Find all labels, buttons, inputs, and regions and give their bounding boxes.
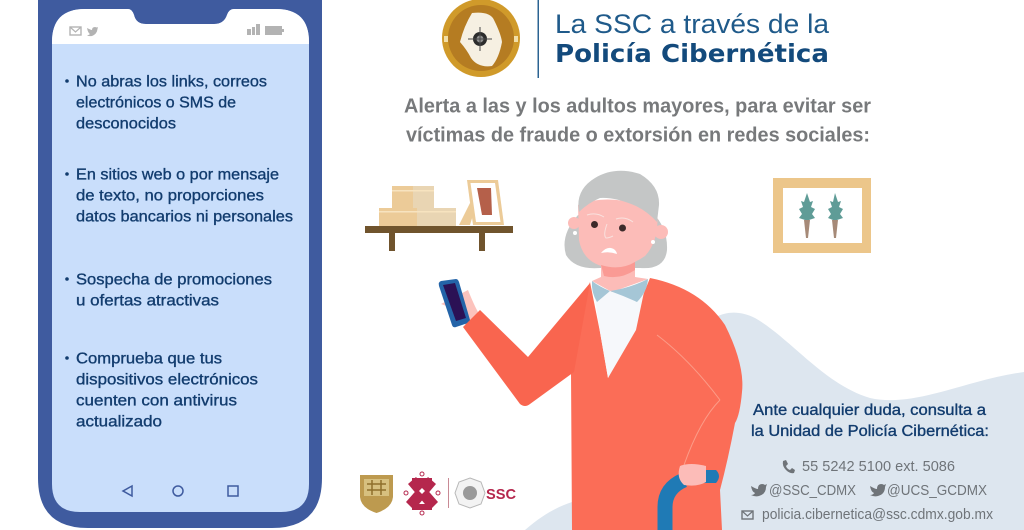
advice 4: dispositivos electrónicos [76, 372, 258, 388]
twitter SSC: @SSC_CDMX [769, 483, 856, 499]
advice 1: electrónicos o SMS de [76, 94, 236, 112]
left hand [441, 290, 478, 328]
advice 4: cuenten con antivirus [76, 392, 237, 410]
logo: CDMX red knot [404, 472, 440, 515]
gripping hand [679, 464, 706, 486]
phone navigation buttons [123, 486, 238, 496]
glasses [587, 214, 633, 238]
ears [568, 217, 580, 229]
coat lapel line [657, 335, 720, 465]
contact heading: Ante cualquier duda, consulta a [753, 402, 986, 419]
contact details [742, 459, 994, 523]
lower hair [564, 212, 667, 268]
advice 3 [65, 272, 272, 310]
contact heading: la Unidad de Policía Cibernética: [751, 423, 989, 440]
phone body [38, 0, 322, 528]
subtitle: víctimas de fraude o extorsión en redes sociales: [406, 124, 870, 146]
contact heading [751, 402, 989, 440]
illustration: elderly woman with phone [439, 171, 742, 530]
logo: CDMX shield [360, 475, 393, 513]
logo divider [448, 478, 449, 508]
phone screen [52, 9, 309, 512]
neck [592, 258, 648, 292]
face [578, 200, 658, 268]
advice 3: u ofertas atractivas [76, 292, 219, 310]
advice 4 [65, 350, 258, 430]
coat [571, 278, 742, 530]
advice 1: desconocidos [76, 116, 176, 132]
mouth [601, 248, 617, 254]
advice 2: datos bancarios ni personales [76, 208, 293, 226]
phone number: 55 5242 5100 ext. 5086 [802, 459, 955, 475]
subtitle [404, 96, 871, 146]
advice 4: Comprueba que tus [76, 350, 222, 368]
twitter UCS: @UCS_GCDMX [887, 483, 987, 499]
shelf with boxes and photo frame [365, 180, 513, 251]
cane [665, 480, 684, 530]
email: policia.cibernetica@ssc.cdmx.gob.mx [762, 507, 994, 523]
logo: SSC [455, 478, 516, 508]
title: La SSC a través de la [555, 9, 830, 39]
advice 3: Sospecha de promociones [76, 272, 272, 288]
advice 1: No abras los links, correos [76, 74, 267, 90]
header divider [538, 0, 539, 78]
raised arm [463, 283, 590, 406]
panel: phone with advice [38, 0, 322, 528]
logo: cyber police badge [442, 0, 520, 77]
title: Policía Cibernética [555, 39, 829, 68]
small phone [439, 279, 470, 327]
collar [592, 279, 648, 302]
title [555, 9, 830, 68]
advice 4: actualizado [76, 414, 162, 430]
upper hair [578, 171, 659, 222]
earrings [573, 231, 577, 235]
cane handle [702, 470, 719, 483]
framed plants picture [773, 178, 871, 253]
background hill [525, 313, 1024, 530]
shirt [594, 292, 644, 378]
advice 1 [65, 74, 267, 132]
status bar [52, 9, 309, 44]
logo: SSC: SSC [486, 486, 516, 503]
subtitle: Alerta a las y los adultos mayores, para evitar ser [404, 96, 871, 118]
eyes [591, 221, 598, 228]
advice 2 [65, 166, 293, 226]
advice 2: de texto, no proporciones [76, 188, 264, 204]
advice 2: En sitios web o por mensaje [76, 166, 279, 184]
chin shadow [601, 262, 635, 277]
